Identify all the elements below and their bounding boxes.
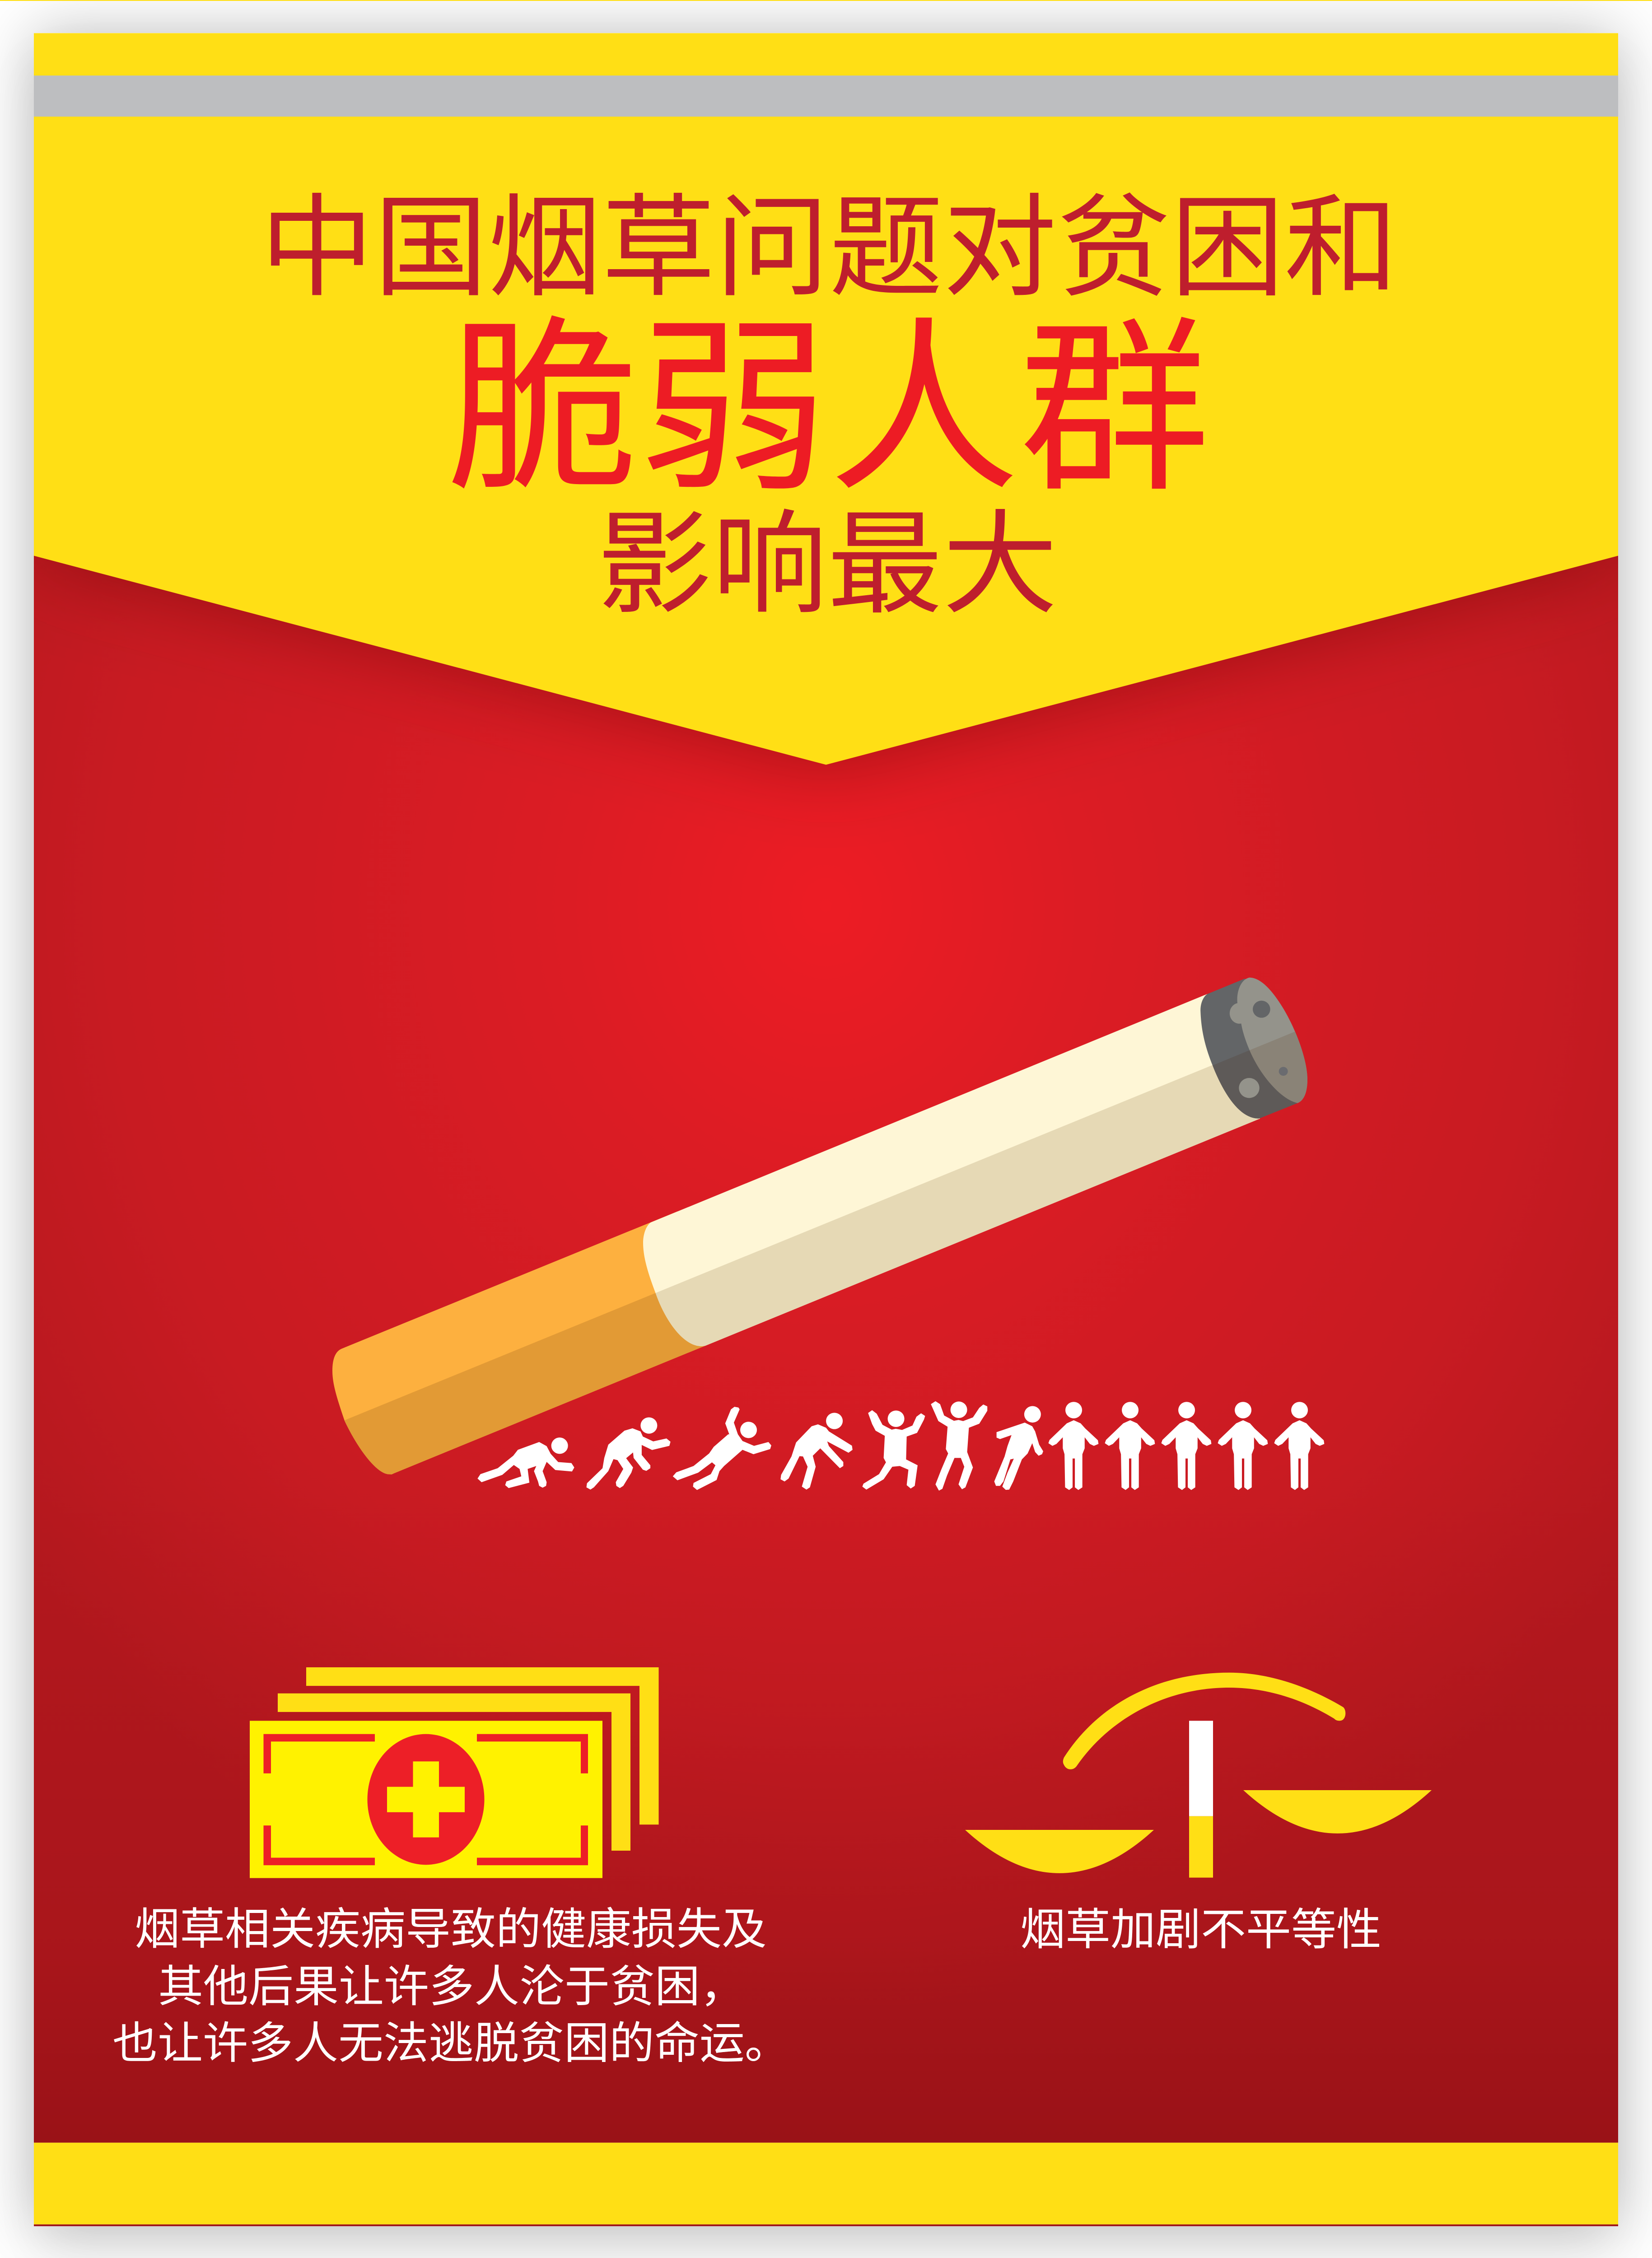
text block: health losses and poverty: 烟草相关疾病导致的健康损失及 xyxy=(135,1904,767,1954)
text block: health losses and poverty: 其他后果让许多人沦于贫困， xyxy=(158,1962,745,2011)
person 7 leaning xyxy=(994,1406,1043,1490)
person 9 standing xyxy=(1105,1402,1155,1490)
person 10 standing xyxy=(1161,1402,1211,1490)
top yellow hairline xyxy=(0,0,1652,1)
panel: yellow chevron header xyxy=(34,33,1618,765)
person 4 bending xyxy=(780,1413,853,1489)
scale beam arc xyxy=(1063,1673,1345,1769)
back banknote xyxy=(306,1667,658,1824)
icon: unbalanced scale xyxy=(965,1673,1432,1878)
left pan xyxy=(965,1830,1154,1873)
person 5 arms raised stepping xyxy=(862,1410,925,1489)
title line 1: 中国烟草问题对贫困和 xyxy=(260,185,1398,310)
text block: inequality: 烟草加剧不平等性 xyxy=(1020,1904,1381,1954)
cigarette filter xyxy=(332,1211,723,1474)
person 1 crawling xyxy=(477,1437,574,1488)
person 6 arms raised xyxy=(931,1401,987,1491)
person 2 stumbling xyxy=(586,1417,671,1489)
right pan xyxy=(1243,1790,1432,1833)
front banknote xyxy=(250,1721,602,1878)
person 8 standing xyxy=(1048,1402,1098,1490)
cigarette paper xyxy=(643,994,1260,1346)
cigarette ash tip xyxy=(1200,978,1307,1119)
scale post cigarette xyxy=(1189,1721,1213,1878)
person 11 standing xyxy=(1218,1402,1268,1490)
title line 3: 影响最大 xyxy=(597,502,1058,628)
person 3 falling with raised arm xyxy=(673,1407,771,1490)
text block: health losses and poverty: 也让许多人无法逃脱贫困的命运。 xyxy=(112,2018,790,2068)
panel: red background xyxy=(34,486,1618,2143)
text block: health losses and poverty xyxy=(112,1904,790,2068)
icon: stacked banknotes with medical cross xyxy=(250,1667,658,1878)
icon: cigarette xyxy=(332,978,1307,1474)
title xyxy=(260,185,1398,628)
person 12 standing xyxy=(1274,1402,1324,1490)
title line 2: 脆弱人群 xyxy=(448,305,1210,513)
middle banknote xyxy=(278,1694,630,1851)
icon: row of people rising from collapsed to standing xyxy=(477,1401,1324,1491)
footer band xyxy=(34,2143,1618,2226)
